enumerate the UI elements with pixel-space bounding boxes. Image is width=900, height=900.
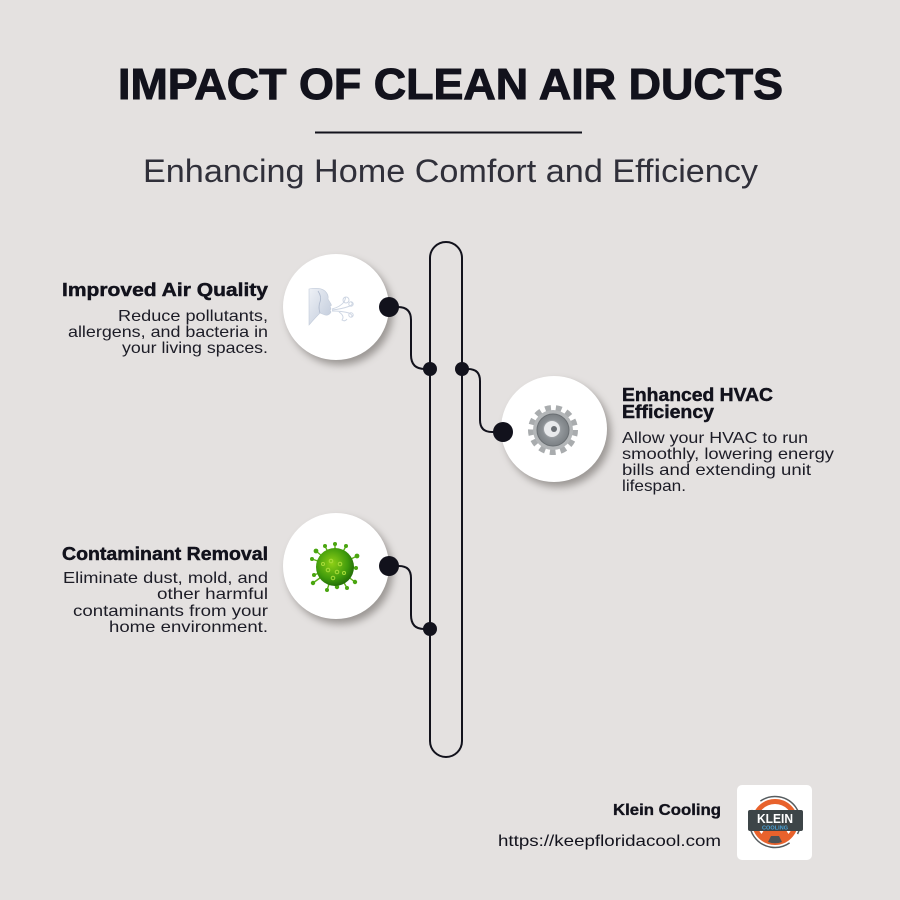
title divider rule xyxy=(315,132,582,134)
text: improved air quality description: allergens, and bacteria in xyxy=(68,324,268,341)
text: contaminant removal description: home environment. xyxy=(109,619,268,636)
connector dot: air quality xyxy=(379,297,399,317)
panel: contaminant removal xyxy=(62,513,437,636)
footer url: https://keepfloridacool.com xyxy=(498,833,721,850)
heading: enhanced HVAC efficiency: Enhanced HVAC xyxy=(622,384,773,405)
text: HVAC efficiency description: bills and extending unit xyxy=(622,462,812,479)
heading: contaminant removal: Contaminant Removal xyxy=(62,543,268,564)
panel: enhanced HVAC efficiency xyxy=(455,362,834,495)
heading: enhanced HVAC efficiency: Efficiency xyxy=(622,401,715,422)
icon circle: gear xyxy=(501,376,611,487)
icon circle: virus xyxy=(283,513,393,624)
text: improved air quality description: your living spaces. xyxy=(122,340,268,357)
central duct diagram with connectors xyxy=(389,242,503,757)
icon circle: face blowing air xyxy=(283,254,393,365)
heading: improved air quality: Improved Air Quality xyxy=(62,279,269,300)
text: contaminant removal description: other harmful xyxy=(157,586,268,603)
text: HVAC efficiency description: smoothly, lowering energy xyxy=(622,446,834,463)
logo: Klein Cooling badge xyxy=(737,785,812,860)
text: HVAC efficiency description: lifespan. xyxy=(622,478,686,495)
junction dot: HVAC xyxy=(455,362,469,376)
connector dot: contaminants xyxy=(379,556,399,576)
subtitle: Enhancing Home Comfort and Efficiency xyxy=(143,153,758,189)
logo: Klein Cooling badge: KLEIN xyxy=(757,811,793,826)
text: HVAC efficiency description: Allow your HVAC to run xyxy=(622,430,808,447)
text: improved air quality description: Reduce pollutants, xyxy=(118,308,268,325)
logo: Klein Cooling badge: COOLING xyxy=(762,826,788,832)
connector dot: HVAC xyxy=(493,422,513,442)
text: contaminant removal description: contaminants from your xyxy=(73,603,269,620)
title: IMPACT OF CLEAN AIR DUCTS xyxy=(118,60,783,109)
heading: enhanced HVAC efficiency xyxy=(622,384,773,422)
junction dot: contaminants xyxy=(423,622,437,636)
text: HVAC efficiency description xyxy=(622,430,834,495)
text: contaminant removal description xyxy=(63,570,269,636)
panel: improved air quality xyxy=(62,254,437,376)
junction dot: air quality xyxy=(423,362,437,376)
footer brand name: Klein Cooling xyxy=(613,802,721,819)
text: contaminant removal description: Eliminate dust, mold, and xyxy=(63,570,268,587)
text: improved air quality description xyxy=(68,308,268,357)
